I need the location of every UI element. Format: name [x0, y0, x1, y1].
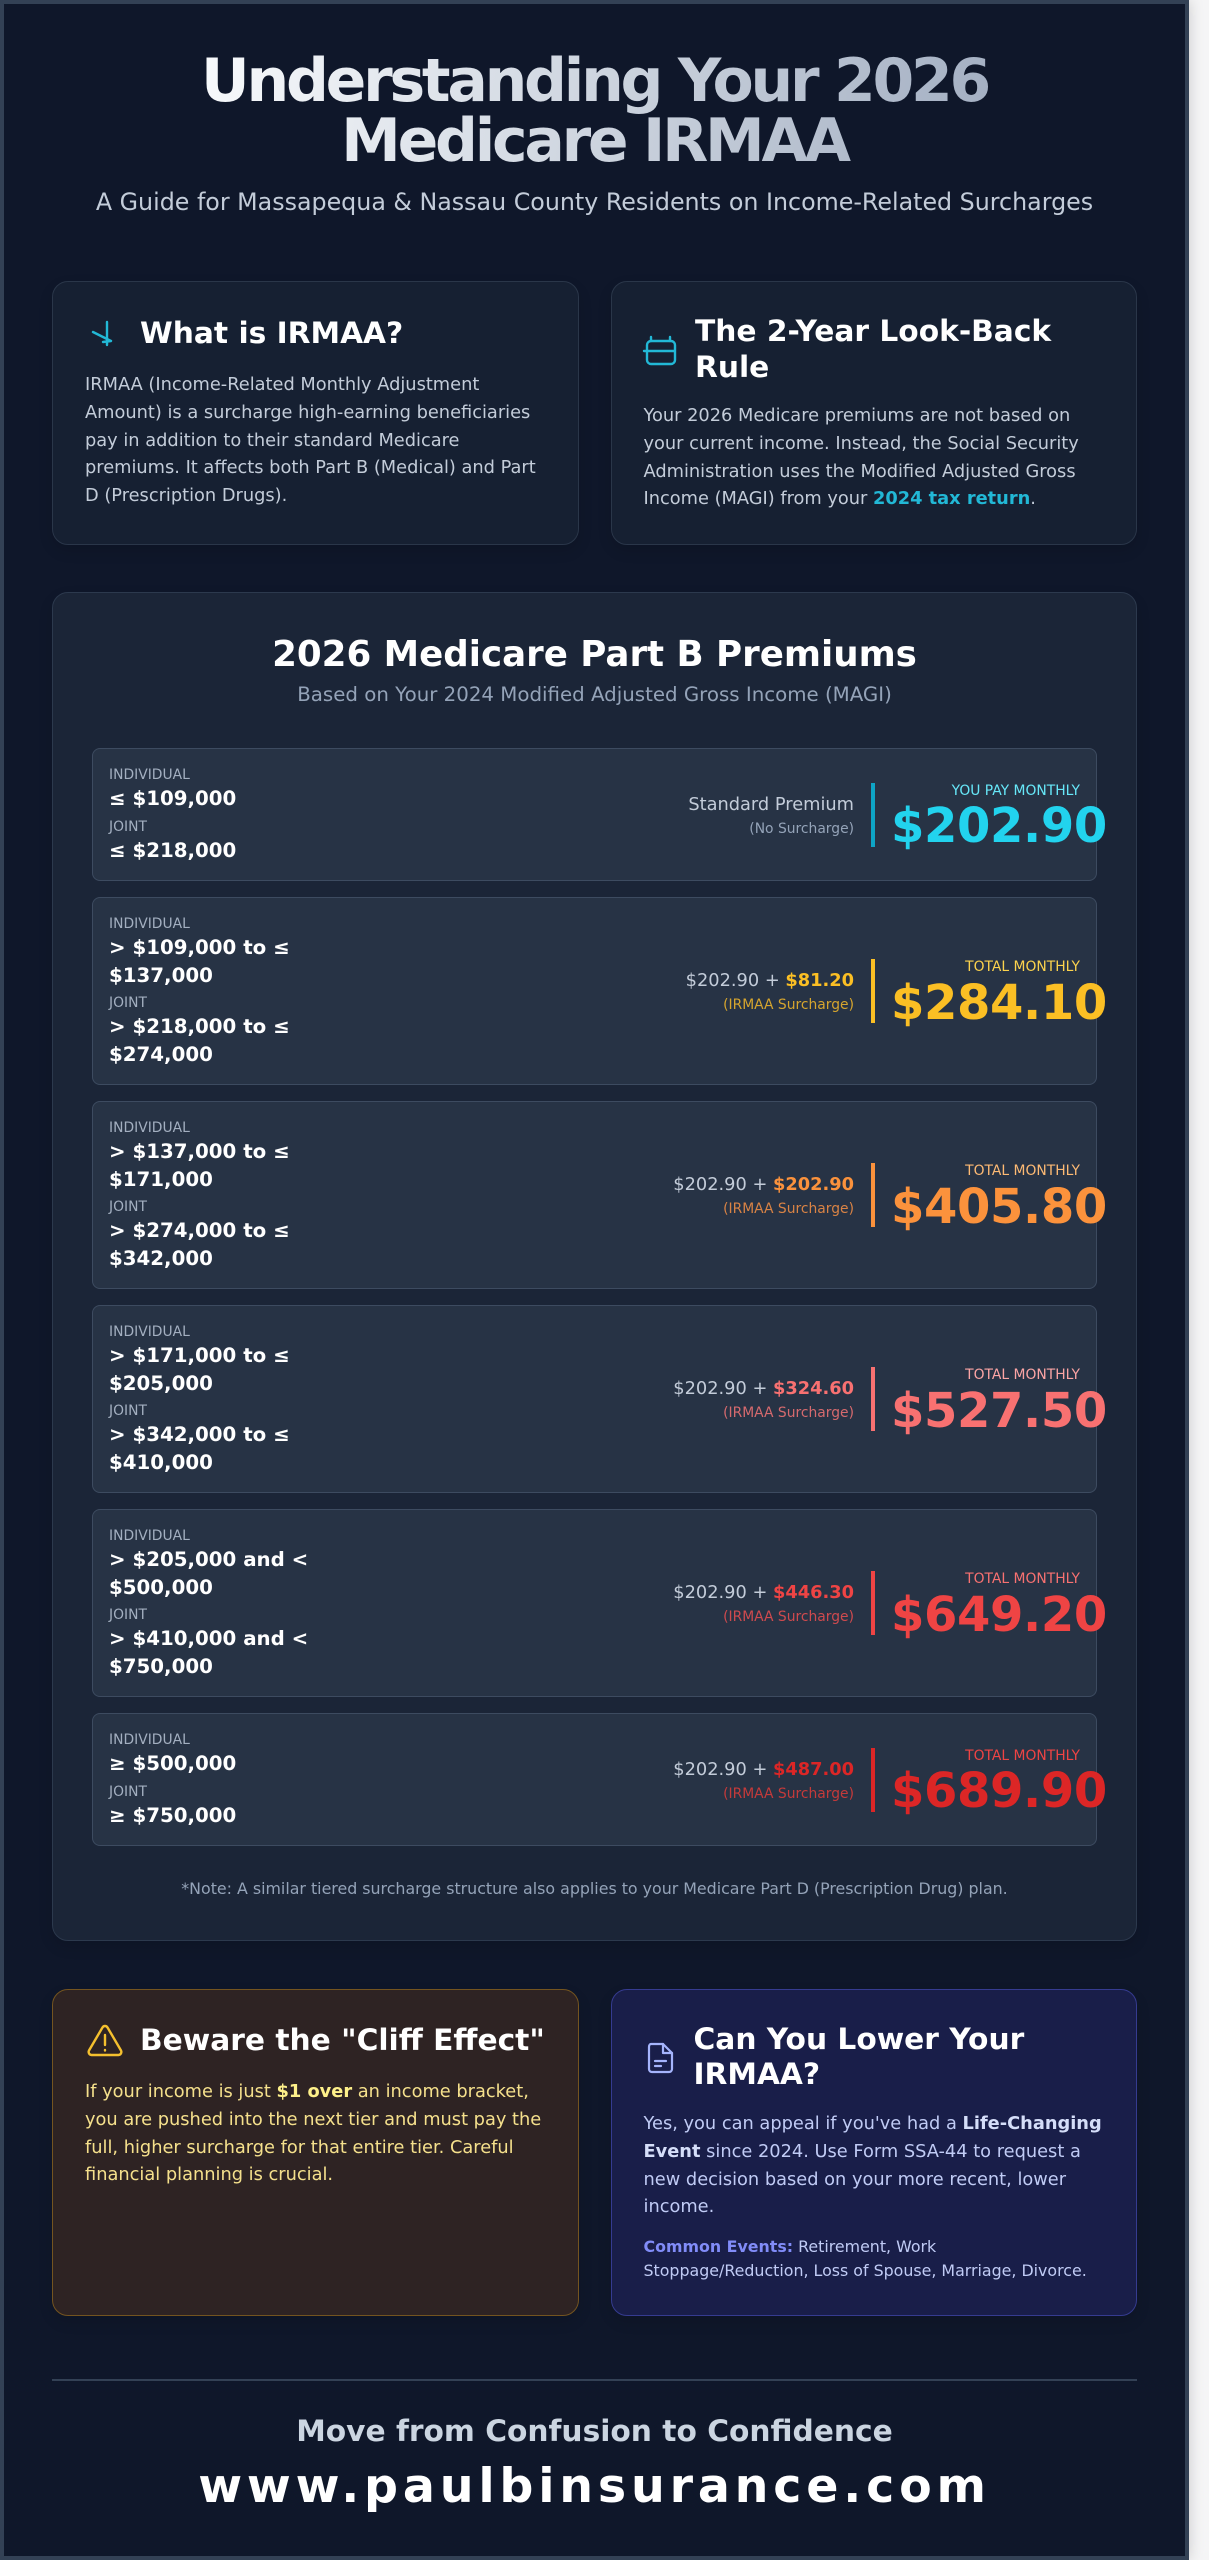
premium breakdown [688, 794, 854, 836]
income brackets: INDIVIDUAL [109, 1732, 190, 1748]
income brackets: > $274,000 to ≤ [109, 1219, 290, 1242]
tier row 2 [92, 897, 1097, 1085]
text: IRMAA definition: D (Prescription Drugs). [85, 485, 287, 506]
income brackets: $342,000 [109, 1246, 213, 1270]
text: look-back explanation: Income (MAGI) from your 2024 tax return. [644, 488, 1036, 509]
tier row 3 [92, 1101, 1097, 1289]
income brackets: JOINT [109, 1784, 147, 1800]
text: IRMAA definition [85, 374, 536, 506]
text: appeal explanation: Yes, you can appeal if you've had a Life-Changing [644, 2113, 1102, 2134]
premium breakdown: (IRMAA Surcharge) [723, 1405, 854, 1421]
icon: calendar [642, 336, 676, 366]
premium breakdown [686, 970, 854, 1013]
tier row 4 [92, 1305, 1097, 1493]
heading: premiums: 2026 Medicare Part B Premiums [272, 634, 917, 674]
text: cliff effect explanation: If your income is just $1 over an income bracket, [85, 2081, 529, 2102]
total price: $689.90 [891, 1763, 1107, 1819]
premium breakdown [673, 1174, 854, 1217]
income brackets: INDIVIDUAL [109, 767, 190, 783]
heading: look-back rule: The 2-Year Look-Back [695, 314, 1051, 348]
income brackets: > $137,000 to ≤ [109, 1140, 290, 1163]
accent bar [871, 1748, 875, 1812]
income brackets: ≤ $218,000 [109, 838, 236, 862]
divider [52, 2379, 1137, 2381]
income brackets [108, 916, 290, 1066]
income brackets: $750,000 [109, 1654, 213, 1678]
panel: look-back rule [610, 281, 1137, 545]
total price: $405.80 [891, 1178, 1107, 1234]
heading: lower your IRMAA [694, 2022, 1024, 2092]
premium breakdown: $202.90 + $202.90 [673, 1174, 854, 1195]
income brackets: JOINT [109, 995, 147, 1011]
premium breakdown: $202.90 + $81.20 [686, 970, 854, 991]
icon: document [648, 2042, 674, 2074]
accent bar [871, 959, 875, 1023]
footnote: *Note: A similar tiered surcharge structure also applies to your Medicare Part D (Prescription Drug) plan. [181, 1878, 1008, 1898]
text: common events [644, 2237, 1087, 2280]
premium breakdown: (IRMAA Surcharge) [723, 1201, 854, 1217]
income brackets: JOINT [109, 1403, 147, 1419]
tier row 1 [92, 748, 1097, 881]
heading: lower your IRMAA: Can You Lower Your [694, 2022, 1024, 2057]
total price: TOTAL MONTHLY [965, 1571, 1080, 1587]
tier row 5 [92, 1509, 1097, 1697]
heading: cliff effect: Beware the "Cliff Effect" [140, 2023, 545, 2058]
text: common events: Stoppage/Reduction, Loss of Spouse, Marriage, Divorce. [644, 2261, 1087, 2280]
text: appeal explanation: Event since 2024. Use Form SSA-44 to request a [644, 2141, 1081, 2162]
premium breakdown: $202.90 + $324.60 [673, 1378, 854, 1399]
premium breakdown [673, 1378, 854, 1421]
subheading: MAGI basis: Based on Your 2024 Modified Adjusted Gross Income (MAGI) [297, 683, 892, 706]
income brackets: INDIVIDUAL [109, 916, 190, 932]
income brackets: > $218,000 to ≤ [109, 1015, 290, 1038]
tier row 6 [92, 1713, 1097, 1846]
accent bar [871, 1571, 875, 1635]
panel: part B premiums [52, 592, 1137, 1941]
text: appeal explanation: income. [644, 2196, 714, 2217]
total price: $202.90 [891, 798, 1107, 854]
text: look-back explanation: Your 2026 Medicare premiums are not based on [644, 405, 1070, 426]
total price: $649.20 [891, 1586, 1107, 1642]
income brackets: $410,000 [109, 1450, 213, 1474]
income brackets [108, 1120, 290, 1270]
title [201, 46, 988, 176]
income brackets: $274,000 [109, 1042, 213, 1066]
income brackets: ≤ $109,000 [109, 787, 236, 810]
income brackets: ≥ $500,000 [109, 1752, 236, 1775]
heading: look-back rule: Rule [695, 350, 769, 384]
panel: what is IRMAA [52, 281, 578, 545]
panel: cliff effect [52, 1989, 578, 2316]
total price: YOU PAY MONTHLY [952, 782, 1080, 798]
total price: TOTAL MONTHLY [965, 1163, 1080, 1179]
text: look-back explanation: Administration uses the Modified Adjusted Gross [644, 460, 1076, 482]
accent bar [871, 782, 875, 846]
text: cliff effect explanation: you are pushed into the next tier and must pay the [85, 2109, 541, 2130]
income brackets: JOINT [109, 818, 147, 834]
total price: TOTAL MONTHLY [965, 1748, 1080, 1764]
footer website: www.paulbinsurance.com [198, 2459, 991, 2514]
income brackets [108, 767, 236, 862]
total price: $284.10 [891, 974, 1107, 1030]
text: look-back explanation: your current income. Instead, the Social Security [644, 433, 1079, 454]
income brackets: INDIVIDUAL [109, 1528, 190, 1544]
total price: TOTAL MONTHLY [965, 1367, 1080, 1383]
accent bar [871, 1367, 875, 1431]
income brackets: > $205,000 and < [109, 1548, 308, 1571]
income brackets: INDIVIDUAL [109, 1324, 190, 1340]
income brackets: > $342,000 to ≤ [109, 1423, 290, 1446]
text: cliff effect explanation [85, 2081, 541, 2185]
heading: lower your IRMAA: IRMAA? [694, 2057, 820, 2092]
premium breakdown: Standard Premium [688, 794, 854, 814]
subtitle: A Guide for Massapequa & Nassau County Residents on Income-Related Surcharges [96, 188, 1093, 216]
income brackets: $500,000 [109, 1576, 213, 1598]
accent bar [871, 1163, 875, 1227]
premium breakdown: (IRMAA Surcharge) [723, 997, 854, 1013]
total price: TOTAL MONTHLY [965, 959, 1080, 975]
text: common events: Common Events: Retirement, Work [644, 2237, 936, 2256]
premium breakdown: $202.90 + $487.00 [673, 1758, 854, 1780]
income brackets: ≥ $750,000 [109, 1804, 236, 1826]
panel: lower your IRMAA [610, 1989, 1137, 2316]
icon: scale glyph [92, 320, 112, 346]
income brackets [108, 1732, 236, 1826]
total price: $527.50 [891, 1382, 1107, 1438]
text: IRMAA definition: IRMAA (Income-Related Monthly Adjustment [85, 374, 479, 395]
income brackets: > $171,000 to ≤ [109, 1344, 290, 1367]
heading: what is IRMAA: What is IRMAA? [140, 316, 403, 350]
text: IRMAA definition: Amount) is a surcharge high-earning beneficiaries [85, 402, 530, 423]
premium breakdown [673, 1582, 854, 1625]
text: IRMAA definition: premiums. It affects both Part B (Medical) and Part [85, 457, 536, 478]
income brackets: $171,000 [109, 1168, 213, 1190]
text: cliff effect explanation: financial planning is crucial. [85, 2164, 333, 2185]
premium breakdown: (No Surcharge) [749, 820, 854, 836]
income brackets [108, 1324, 290, 1474]
title: Medicare IRMAA [341, 106, 848, 176]
title: Understanding Your 2026 [201, 46, 988, 116]
text: appeal explanation: new decision based on your more recent, lower [644, 2168, 1066, 2190]
text: cliff effect explanation: full, higher surcharge for that entire tier. Careful [85, 2136, 514, 2158]
income brackets: > $410,000 and < [109, 1627, 308, 1650]
income brackets: INDIVIDUAL [109, 1120, 190, 1136]
heading: look-back rule [695, 314, 1052, 384]
text: IRMAA definition: pay in addition to their standard Medicare [85, 430, 460, 450]
income brackets: JOINT [109, 1199, 147, 1215]
footer tagline: Move from Confusion to Confidence [296, 2414, 893, 2449]
income brackets: $205,000 [109, 1372, 213, 1394]
income brackets: JOINT [109, 1607, 147, 1623]
icon: warning triangle [87, 2024, 123, 2056]
premium breakdown [673, 1758, 854, 1802]
premium breakdown: (IRMAA Surcharge) [723, 1609, 854, 1625]
text: look-back explanation [644, 405, 1079, 509]
premium breakdown: $202.90 + $446.30 [673, 1582, 854, 1603]
income brackets: $137,000 [109, 964, 213, 986]
text: appeal explanation [644, 2113, 1102, 2217]
income brackets: > $109,000 to ≤ [109, 936, 290, 959]
income brackets [108, 1528, 308, 1678]
premium breakdown: (IRMAA Surcharge) [723, 1786, 854, 1802]
